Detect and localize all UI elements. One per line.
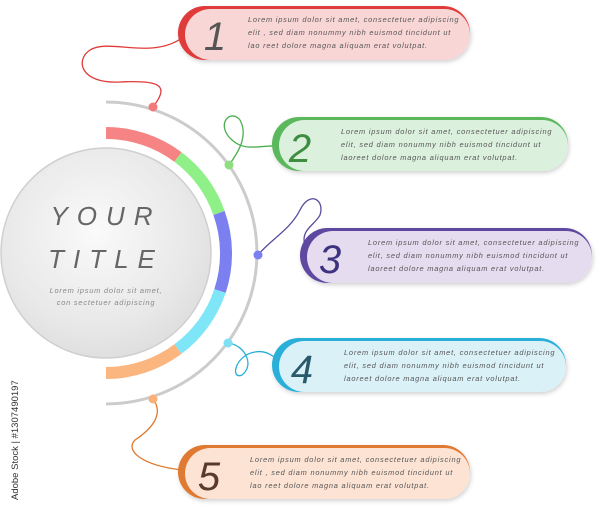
pill 5: 5 bbox=[198, 455, 221, 499]
title circle: TITLE bbox=[48, 244, 164, 274]
pill 4: elit, sed diam nonummy nibh euismod tincidunt ut bbox=[344, 361, 544, 370]
title circle bbox=[1, 148, 211, 358]
pill 5: elit , sed diam nonummy nibh euismod tincidunt ut bbox=[250, 468, 453, 477]
pill 1: lao reet dolore magna aliquam erat volutpat. bbox=[248, 41, 428, 50]
gray outer arc bbox=[106, 102, 257, 404]
pill 4: laoreet dolore magna aliquam erat volutpat. bbox=[344, 374, 521, 383]
pill 2: elit, sed diam nonummy nibh euismod tincidunt ut bbox=[341, 140, 541, 149]
pill 1: 1 bbox=[204, 15, 226, 59]
title circle: YOUR bbox=[50, 201, 162, 231]
stock id: Adobe Stock | #1307490197 bbox=[10, 380, 21, 500]
pill 1: elit , sed diam nonummy nibh euismod tincidunt ut bbox=[248, 28, 451, 37]
pill 3: Lorem ipsum dolor sit amet, consectetuer adipiscing bbox=[368, 238, 579, 247]
pill 4: Lorem ipsum dolor sit amet, consectetuer adipiscing bbox=[344, 348, 555, 357]
pill 5: lao reet dolore magna aliquam erat volutpat. bbox=[250, 481, 430, 490]
pill 4: 4 bbox=[291, 348, 313, 392]
dots bbox=[148, 102, 262, 404]
title circle: con sectetuer adipiscing bbox=[57, 298, 155, 307]
pill 5: Lorem ipsum dolor sit amet, consectetuer adipiscing bbox=[250, 455, 461, 464]
pill 1: Lorem ipsum dolor sit amet, consectetuer adipiscing bbox=[248, 15, 459, 24]
strings bbox=[82, 38, 321, 470]
pill 2: Lorem ipsum dolor sit amet, consectetuer adipiscing bbox=[341, 127, 552, 136]
pill 4 bbox=[272, 338, 566, 392]
pill 2: 2 bbox=[288, 127, 311, 171]
pill 5 bbox=[178, 445, 470, 499]
pill 3: laoreet dolore magna aliquam erat volutpat. bbox=[368, 264, 545, 273]
colored ring bbox=[106, 133, 226, 373]
title circle: Lorem ipsum dolor sit amet, bbox=[50, 286, 162, 295]
pill 2 bbox=[272, 117, 568, 171]
pill 3: 3 bbox=[319, 238, 341, 282]
pill 3: elit, sed diam nonummy nibh euismod tincidunt ut bbox=[368, 251, 568, 260]
pill 1 bbox=[178, 6, 470, 60]
pill 2: laoreet dolore magna aliquam erat volutpat. bbox=[341, 153, 518, 162]
pill 3 bbox=[300, 228, 592, 283]
